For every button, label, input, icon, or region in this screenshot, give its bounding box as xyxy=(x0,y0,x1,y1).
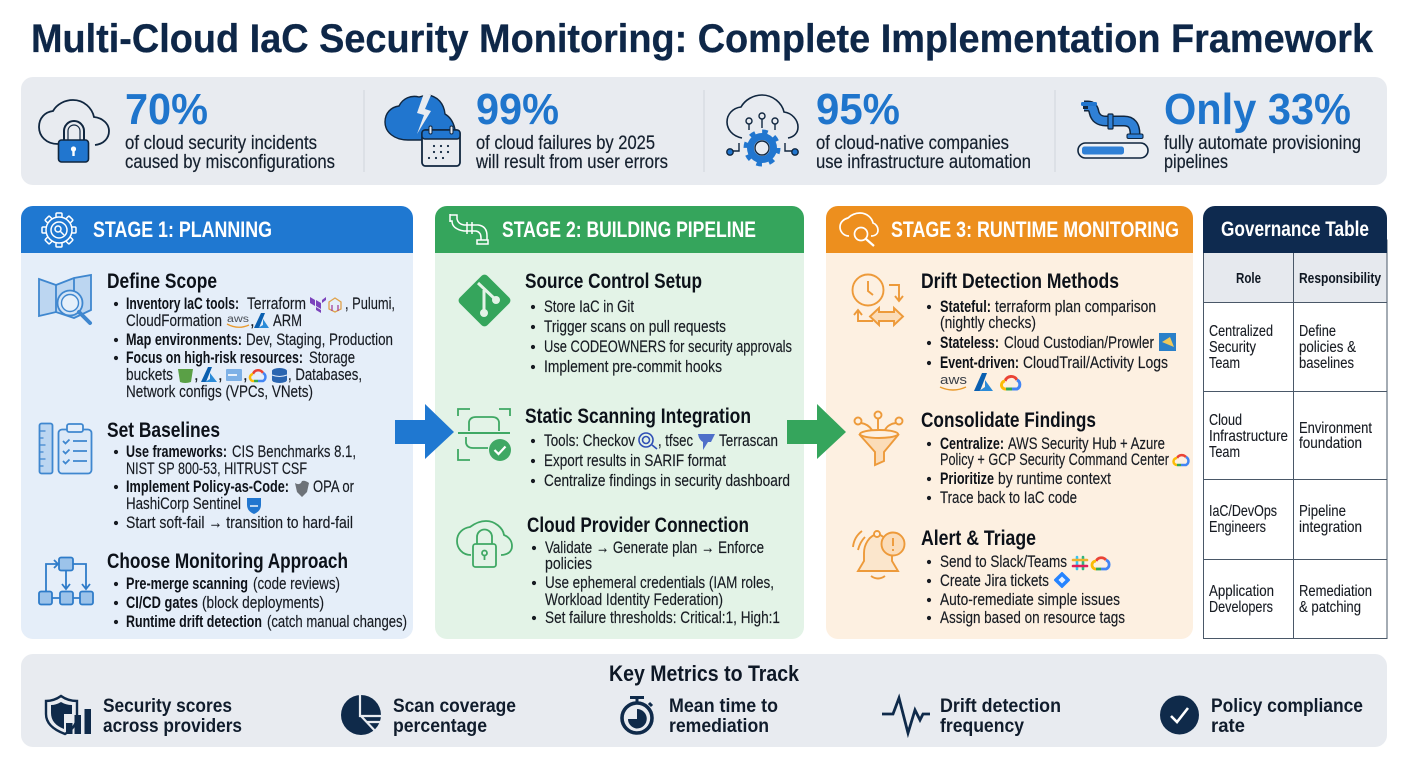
heading: source control: Source Control Setup xyxy=(525,269,702,293)
heading: consolidate findings: Consolidate Findings xyxy=(921,408,1096,432)
icon: aws mark xyxy=(940,372,968,390)
text: cloud provider bullets: Workload Identity Federation) xyxy=(545,591,723,609)
text: cloud provider bullets: Validate → Generate plan → Enforce xyxy=(545,539,764,557)
text: set baselines bullets: Use frameworks: xyxy=(126,443,227,461)
table row: cloud infrastructure team: Environment xyxy=(1299,420,1372,437)
icon: check circle xyxy=(1160,696,1199,734)
text: define scope bullets: , Databases, xyxy=(288,366,362,384)
text: monitoring approach bullets: CI/CD gates xyxy=(126,594,198,612)
metric: policy compliance rate: rate xyxy=(1211,715,1245,737)
table row: application developers: & patching xyxy=(1299,599,1361,616)
table row: centralized security team: policies & xyxy=(1299,339,1356,356)
text: define scope bullets: , xyxy=(250,312,255,330)
icon: storage bucket xyxy=(178,369,193,383)
text: monitoring approach bullets xyxy=(114,575,407,631)
stat: 99% xyxy=(475,85,668,173)
panel: stage 3 runtime monitoring xyxy=(826,206,1193,639)
text: define scope bullets: Terraform xyxy=(247,295,306,313)
text: define scope bullets: Inventory IaC tools: xyxy=(126,295,239,313)
text: set baselines bullets: Implement Policy-as-Code: xyxy=(126,478,289,496)
heading: cloud provider connection: Cloud Provider Connection xyxy=(527,513,749,537)
icon: slack mark xyxy=(1073,557,1087,569)
table row: centralized security team: Security xyxy=(1209,339,1256,356)
text: cloud provider bullets: Use ephemeral credentials (IAM roles, xyxy=(545,574,774,592)
text: consolidate findings bullets: by runtime context xyxy=(998,470,1111,488)
icon: OPA viking xyxy=(295,481,309,497)
stat: 99%: 99% xyxy=(476,85,559,134)
metric: mean time to remediation xyxy=(669,695,778,737)
text: static scanning bullets: Export results in SARIF format xyxy=(544,452,726,470)
text: cloud provider bullets: Set failure thresholds: Critical:1, High:1 xyxy=(545,609,780,627)
table row: cloud infrastructure team: Team xyxy=(1209,444,1240,461)
text: static scanning bullets: Terrascan xyxy=(719,432,778,450)
heading: stage 3: STAGE 3: RUNTIME MONITORING xyxy=(891,217,1179,242)
table row: centralized security team: Define xyxy=(1299,323,1336,340)
text: alert and triage bullets: Create Jira tickets xyxy=(940,572,1049,590)
icon: terrascan mark xyxy=(698,434,715,450)
table row: iac devops engineers xyxy=(1209,503,1362,536)
text: define scope bullets: Dev, Staging, Production xyxy=(246,331,393,349)
metric: scan coverage: percentage xyxy=(393,715,487,737)
table row: centralized security team xyxy=(1209,323,1356,372)
table row: application developers xyxy=(1209,583,1372,616)
metric: drift detection frequency: Drift detection xyxy=(940,695,1061,717)
icon: pulumi box xyxy=(329,298,341,312)
stat: Only 33%: pipelines xyxy=(1164,152,1228,173)
stat: 70%: 70% xyxy=(125,85,208,134)
icon: azure mark xyxy=(201,367,217,382)
text: set baselines bullets: NIST SP 800-53, HITRUST CSF xyxy=(126,460,307,478)
icon: prowler badge xyxy=(1159,333,1176,351)
text: drift detection bullets: CloudTrail/Activity Logs xyxy=(1023,354,1168,372)
metric: mean time to remediation: remediation xyxy=(669,715,769,737)
stat: Only 33% xyxy=(1164,85,1361,173)
table row: application developers: Remediation xyxy=(1299,583,1372,600)
heading: governance table: Governance Table xyxy=(1221,217,1369,241)
table row: cloud infrastructure team: Cloud xyxy=(1209,412,1242,429)
icon: pulse line xyxy=(882,698,930,733)
icon: cloud with magnifier xyxy=(840,213,878,246)
icon: pie chart xyxy=(341,693,383,735)
icon: cloud with gear and nodes xyxy=(727,95,798,164)
table row: centralized security team: baselines xyxy=(1299,355,1354,372)
panel: stage 1 planning xyxy=(21,206,413,639)
text: alert and triage bullets: Assign based on resource tags xyxy=(940,609,1125,627)
heading: stage 2: STAGE 2: BUILDING PIPELINE xyxy=(502,217,756,242)
heading: drift detection: Drift Detection Methods xyxy=(921,269,1119,293)
icon: sentinel shield xyxy=(247,498,261,514)
stat: 70%: of cloud security incidents xyxy=(125,133,317,154)
text: set baselines bullets: CIS Benchmarks 8.1, xyxy=(232,443,356,461)
text: source control bullets: Use CODEOWNERS for security approvals xyxy=(544,338,792,356)
panel: governance table xyxy=(1203,206,1387,638)
icon: monitoring flow diagram xyxy=(39,558,93,604)
text: consolidate findings bullets xyxy=(927,435,1188,507)
icon: aws mark xyxy=(227,314,249,327)
text: static scanning bullets: Tools: Checkov xyxy=(544,432,636,450)
text: define scope bullets: , xyxy=(218,366,223,384)
table header row xyxy=(1236,270,1382,287)
text: consolidate findings bullets: Prioritize xyxy=(940,470,994,488)
text: consolidate findings bullets: Centralize: xyxy=(940,435,1004,453)
text: set baselines bullets: Start soft-fail → transition to hard-fail xyxy=(126,514,353,532)
heading: stage 1: STAGE 1: PLANNING xyxy=(93,217,272,242)
table row: iac devops engineers: integration xyxy=(1299,519,1362,536)
table row: cloud infrastructure team xyxy=(1209,412,1372,461)
icon: terraform mark xyxy=(310,297,326,313)
text: define scope bullets: , xyxy=(194,366,199,384)
heading: key metrics: Key Metrics to Track xyxy=(609,661,800,686)
heading: static scanning: Static Scanning Integration xyxy=(525,404,751,428)
icon: aws mark: aws xyxy=(227,314,249,325)
text: monitoring approach bullets: Pre-merge scanning xyxy=(126,575,248,593)
text: source control bullets xyxy=(531,298,792,376)
table row: iac devops engineers: Pipeline xyxy=(1299,503,1346,520)
icon: checkov mark xyxy=(639,433,657,449)
text: alert and triage bullets: Auto-remediate simple issues xyxy=(940,591,1120,609)
icon: alert bell xyxy=(853,531,904,578)
table row: application developers: Developers xyxy=(1209,599,1273,616)
stat: 99%: will result from user errors xyxy=(475,152,668,173)
text: consolidate findings bullets: AWS Security Hub + Azure xyxy=(1008,435,1165,453)
panel: stage 2 building pipeline xyxy=(435,206,804,639)
stat: 95%: 95% xyxy=(816,85,900,134)
text: define scope bullets: buckets xyxy=(126,366,173,384)
text: define scope bullets: Storage xyxy=(309,349,355,367)
metric: scan coverage xyxy=(393,695,516,737)
text: source control bullets: Trigger scans on pull requests xyxy=(544,318,726,336)
icon: map with magnifier xyxy=(39,275,91,323)
text: consolidate findings bullets: Trace back to IaC code xyxy=(940,489,1077,507)
icon: google cloud xyxy=(250,370,265,381)
text: define scope bullets: Network configs (VPCs, VNets) xyxy=(126,383,313,401)
metric: drift detection frequency xyxy=(940,695,1061,737)
icon: gear with magnifier xyxy=(42,213,76,247)
text: define scope bullets: , Pulumi, xyxy=(345,295,395,313)
text: set baselines bullets: OPA or xyxy=(313,478,354,496)
text: define scope bullets: Map environments: xyxy=(126,331,242,349)
table row: centralized security team: Team xyxy=(1209,355,1240,372)
text: drift detection bullets: Cloud Custodian/Prowler xyxy=(1004,334,1154,352)
heading: set baselines: Set Baselines xyxy=(107,418,220,442)
text: drift detection bullets: Stateful: xyxy=(940,298,991,316)
text: set baselines bullets xyxy=(114,443,356,532)
icon: git diamond xyxy=(457,273,512,328)
text: cloud provider bullets xyxy=(532,539,780,627)
icon: azure mark xyxy=(254,313,269,328)
text: drift detection bullets: terraform plan comparison xyxy=(995,298,1156,316)
text: define scope bullets xyxy=(114,295,395,401)
text: drift detection bullets: (nightly checks) xyxy=(940,314,1036,332)
text: define scope bullets: , xyxy=(243,366,248,384)
icon: google cloud xyxy=(1092,558,1109,569)
table row: iac devops engineers: IaC/DevOps xyxy=(1209,503,1277,520)
metric: scan coverage: Scan coverage xyxy=(393,695,516,717)
panel: key metrics xyxy=(21,654,1387,747)
metric: security scores: across providers xyxy=(103,715,242,737)
table row: centralized security team: Centralized xyxy=(1209,323,1273,340)
icon: scan with check xyxy=(458,409,511,461)
text: static scanning bullets: , tfsec xyxy=(658,432,693,450)
metric: mean time to remediation: Mean time to xyxy=(669,695,778,717)
icon: database xyxy=(272,368,287,383)
metric: policy compliance rate: Policy compliance xyxy=(1211,695,1363,717)
icon: pipeline with progress bar xyxy=(1078,102,1148,158)
icon: jira diamond xyxy=(1054,572,1070,588)
text: monitoring approach bullets: (catch manual changes) xyxy=(267,613,407,631)
text: static scanning bullets: Centralize findings in security dashboard xyxy=(544,472,790,490)
table row: cloud infrastructure team: Infrastructure xyxy=(1209,428,1288,445)
metric: policy compliance rate xyxy=(1211,695,1363,737)
text: static scanning bullets xyxy=(531,432,790,490)
text: define scope bullets: ARM xyxy=(273,312,302,330)
table row: iac devops engineers: Engineers xyxy=(1209,519,1266,536)
icon: azure mark xyxy=(974,373,993,391)
text: drift detection bullets xyxy=(927,298,1176,391)
stat: Only 33%: Only 33% xyxy=(1164,85,1351,134)
text: monitoring approach bullets: Runtime drift detection xyxy=(126,613,262,631)
text: set baselines bullets: HashiCorp Sentinel xyxy=(126,495,241,513)
stat: 95% xyxy=(816,85,1031,173)
text: source control bullets: Store IaC in Git xyxy=(544,298,634,316)
icon: storm cloud with calendar xyxy=(385,93,460,166)
table header row: Role xyxy=(1236,270,1261,287)
icon: cloud with lock xyxy=(457,521,512,567)
text: alert and triage bullets: Send to Slack/Teams xyxy=(940,553,1067,571)
text: monitoring approach bullets: (block deployments) xyxy=(202,594,324,612)
icon: cloud with padlock xyxy=(39,100,109,162)
stat: Only 33%: fully automate provisioning xyxy=(1164,133,1361,154)
icon: shield with bars xyxy=(46,696,91,734)
text: consolidate findings bullets: Policy + GCP Security Command Center xyxy=(940,451,1169,469)
heading: define scope: Define Scope xyxy=(107,269,217,293)
stat: 70% xyxy=(125,85,335,173)
panel: key statistics xyxy=(21,77,1387,185)
icon: white pipe xyxy=(450,214,488,244)
text: define scope bullets: Focus on high-risk resources: xyxy=(126,349,303,367)
text: define scope bullets: CloudFormation xyxy=(126,312,222,330)
stat: 70%: caused by misconfigurations xyxy=(125,152,335,173)
text: drift detection bullets: Stateless: xyxy=(940,334,999,352)
stat: 95%: use infrastructure automation xyxy=(816,152,1031,173)
text: drift detection bullets: Event-driven: xyxy=(940,354,1019,372)
text: alert and triage bullets xyxy=(927,553,1125,627)
table row: cloud infrastructure team: foundation xyxy=(1299,435,1362,452)
icon: ruler and checklist xyxy=(40,424,92,474)
icon: google cloud xyxy=(1174,455,1188,465)
text: monitoring approach bullets: (code reviews) xyxy=(253,575,340,593)
icon: stopwatch xyxy=(622,698,652,733)
icon: google cloud xyxy=(1001,376,1020,389)
stat: 95%: of cloud-native companies xyxy=(816,133,1009,154)
text: source control bullets: Implement pre-commit hooks xyxy=(544,358,722,376)
heading: alert and triage: Alert & Triage xyxy=(921,526,1036,550)
metric: drift detection frequency: frequency xyxy=(940,715,1024,737)
metric: security scores: Security scores xyxy=(103,695,232,717)
table row: application developers: Application xyxy=(1209,583,1274,600)
icon: funnel xyxy=(854,412,902,465)
text: cloud provider bullets: policies xyxy=(545,555,592,573)
icon: clock and arrows xyxy=(852,274,903,325)
heading: choose monitoring approach: Choose Monitoring Approach xyxy=(107,549,348,573)
metric: security scores xyxy=(103,695,242,737)
title: Multi-Cloud IaC Security Monitoring: Complete Implementation Framework xyxy=(31,17,1374,61)
icon: aws mark: aws xyxy=(940,372,968,387)
icon: storage box xyxy=(226,369,242,381)
table header row: Responsibility xyxy=(1299,270,1382,287)
stat: 99%: of cloud failures by 2025 xyxy=(476,133,655,154)
arrow: stage 1 to stage 2 xyxy=(395,404,454,459)
arrow: stage 2 to stage 3 xyxy=(787,404,846,459)
